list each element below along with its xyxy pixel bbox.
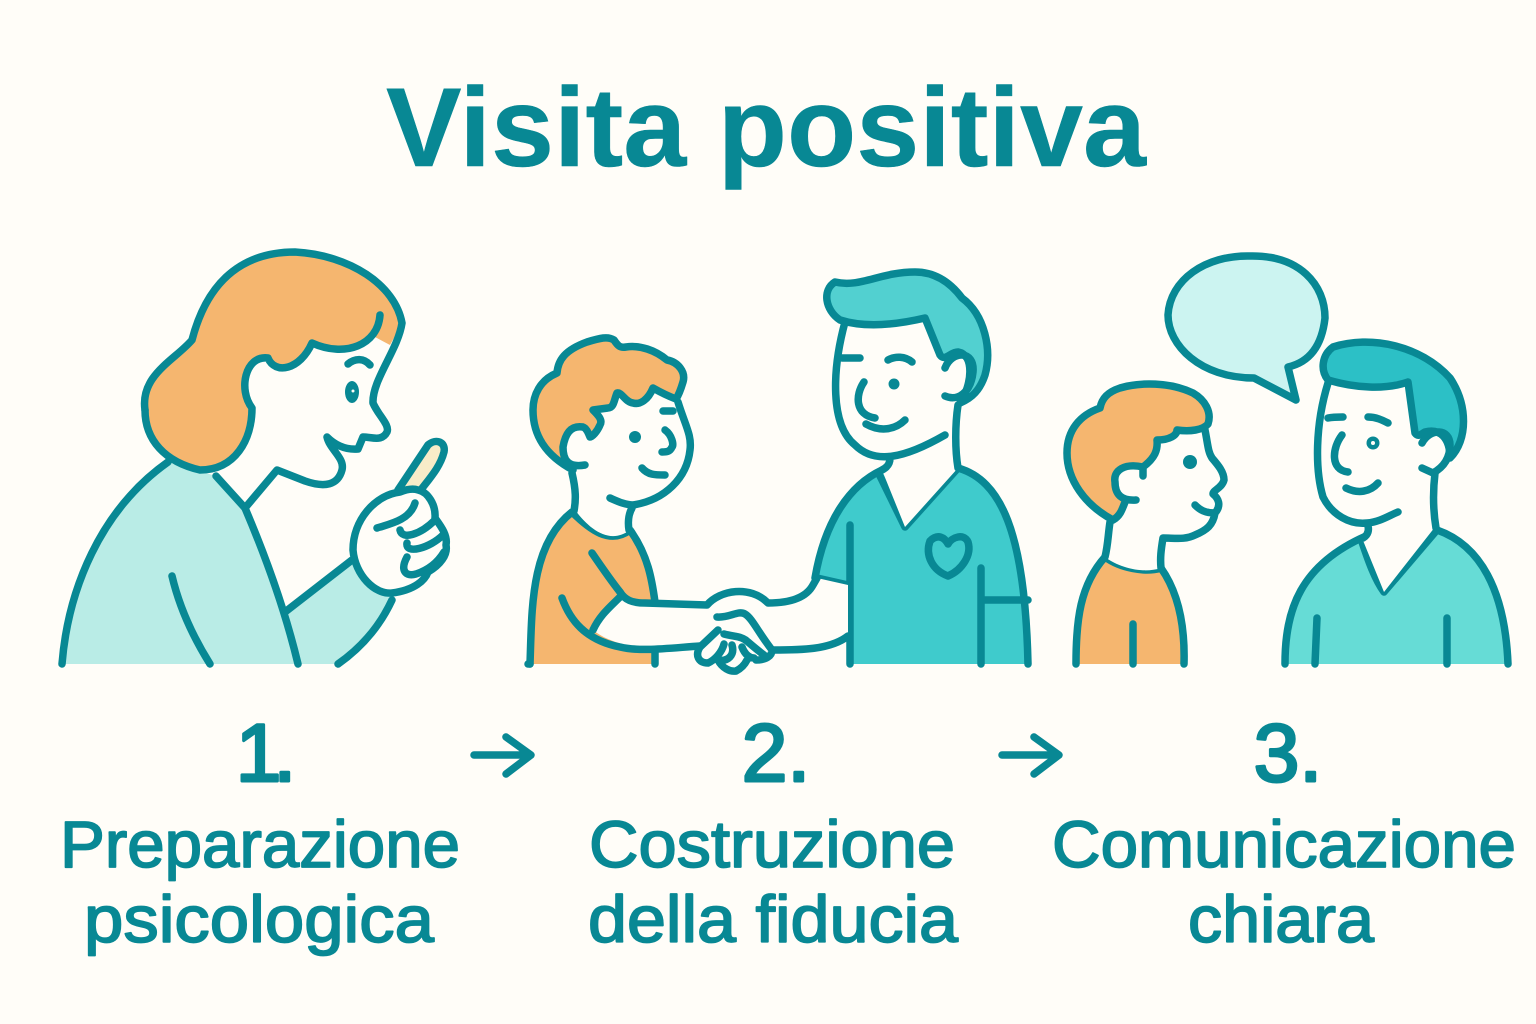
child hair: [533, 338, 684, 470]
step 2 label: [588, 708, 958, 956]
step 3 label: 3.: [1254, 708, 1322, 799]
step 2 label: della fiducia: [588, 882, 958, 956]
speech bubble: [1168, 256, 1325, 400]
adult torso: [815, 468, 1028, 664]
adult hair: [1323, 342, 1464, 458]
hand: [353, 489, 446, 593]
step 1 label: psicologica: [84, 882, 434, 956]
illustration: woman with finger raised: [62, 252, 446, 664]
child face details: [642, 411, 673, 475]
arrow 2: [1002, 737, 1059, 774]
icon: handshake: [698, 613, 772, 672]
adult head: [838, 318, 972, 527]
raised finger: [398, 441, 444, 495]
woman body: [62, 462, 392, 664]
step 2 label: Costruzione: [589, 807, 955, 881]
title: Visita positiva: [386, 65, 1147, 190]
child head: [1105, 430, 1223, 570]
woman hair: [145, 252, 402, 470]
joined arms: [593, 578, 848, 668]
adult face details: [842, 355, 973, 429]
illustration: child and adult handshake: [528, 272, 1028, 672]
arrow 1: [474, 737, 531, 774]
step 2 label: 2.: [742, 708, 810, 799]
step 1 label: Preparazione: [60, 807, 460, 881]
step 1 label: [60, 708, 460, 956]
step 3 label: [1052, 708, 1516, 956]
adult face: [1318, 382, 1435, 592]
illustration: child and adult talking: [1067, 256, 1508, 664]
step 3 label: chiara: [1188, 882, 1374, 956]
adult face details: [1328, 417, 1450, 491]
adult hair: [827, 272, 988, 403]
child face: [572, 388, 690, 536]
child torso: [530, 512, 655, 664]
icon: heart: [928, 537, 969, 576]
step 1 label: 1.: [236, 708, 289, 799]
adult torso: [1285, 530, 1508, 664]
step 3 label: Comunicazione: [1052, 807, 1516, 881]
child hair: [1067, 384, 1209, 520]
child torso: [1076, 557, 1184, 664]
